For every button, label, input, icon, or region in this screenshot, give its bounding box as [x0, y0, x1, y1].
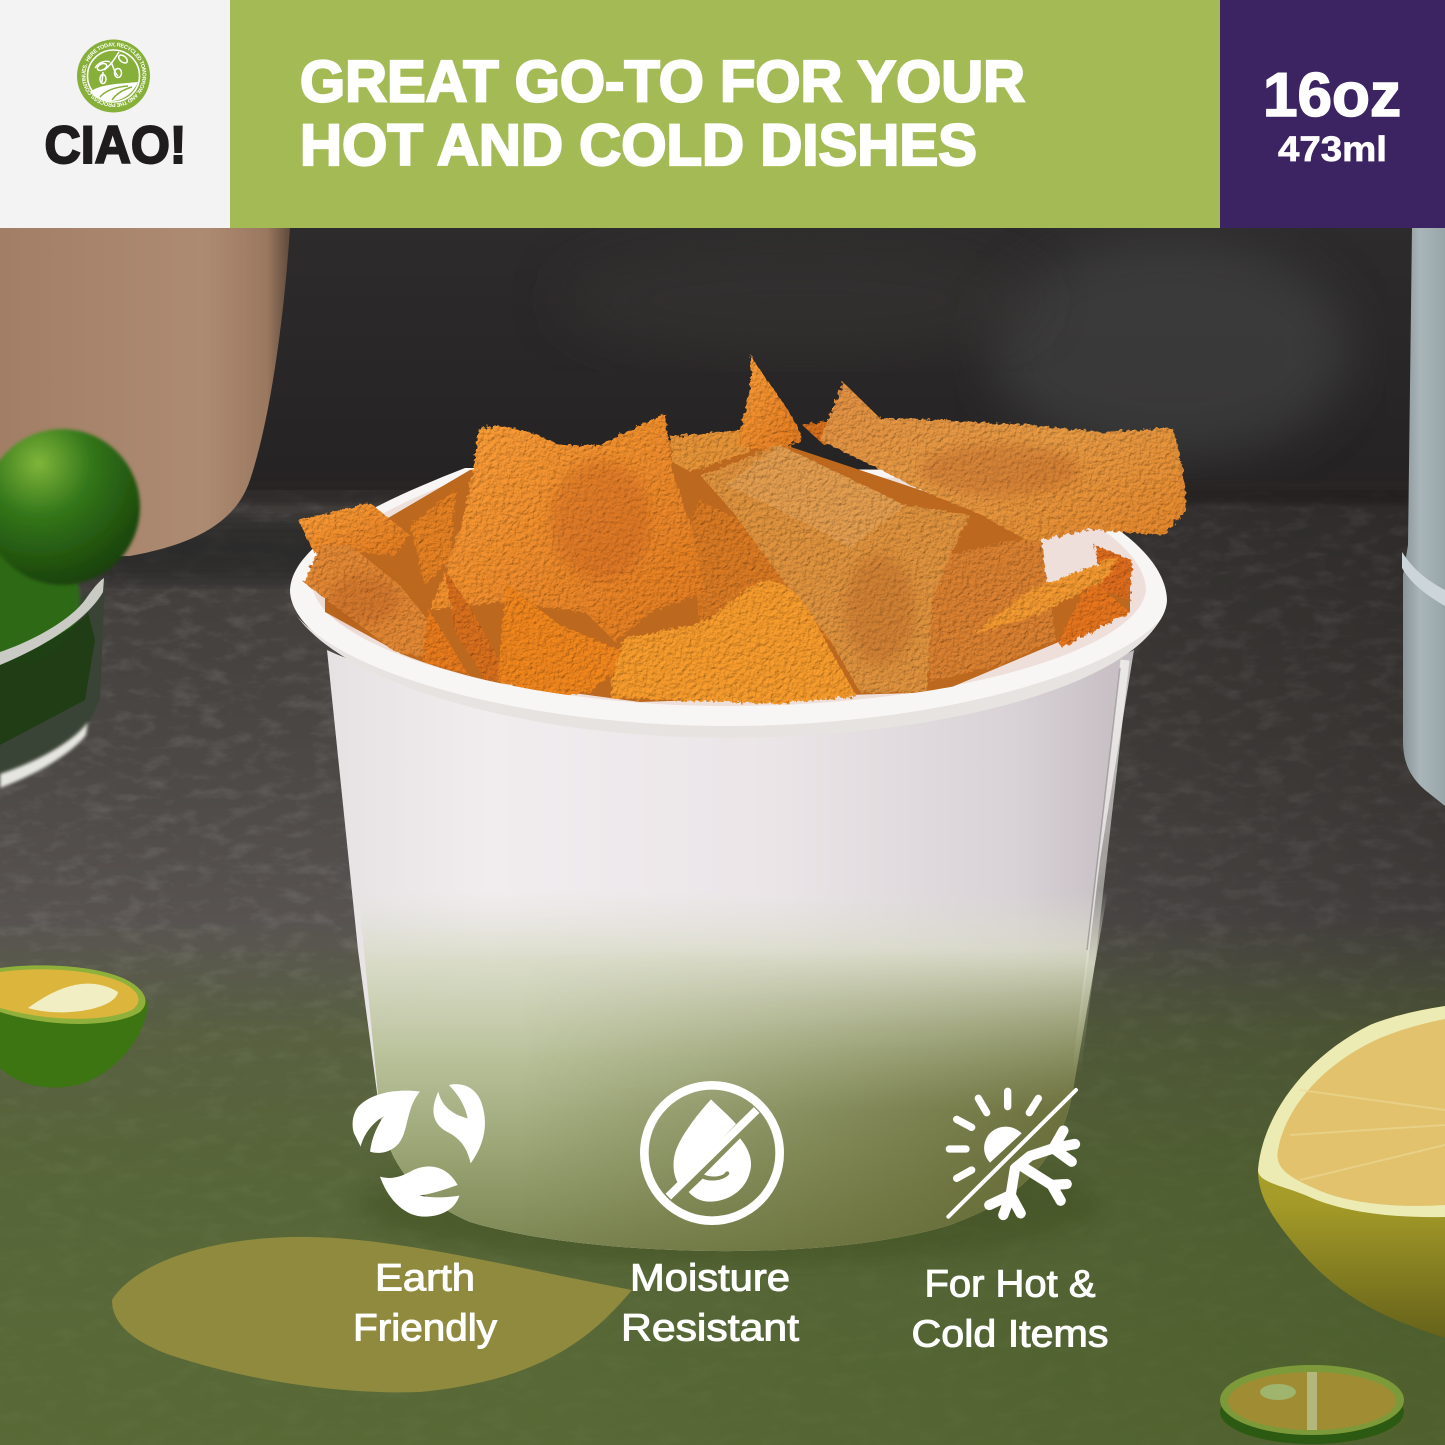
icon: sun and snowflake: [948, 1090, 1076, 1217]
lime slice bottom right: [1220, 1365, 1404, 1444]
label: Friendly: [353, 1308, 497, 1350]
paper cup with chips: [290, 353, 1186, 1251]
label: Cold Items: [912, 1314, 1108, 1356]
logo badge: HERE TODAY, RECYCLED TOMORROW, AND THE PROCESS CONTINUES.: [82, 42, 146, 107]
green gradient overlay: [0, 920, 1445, 1445]
cup rim: [290, 468, 1167, 738]
label: Resistant: [621, 1308, 799, 1350]
lemon half right: [1258, 1006, 1445, 1338]
feature: moisture resistant: [621, 1085, 799, 1350]
cup body: [327, 650, 1134, 1251]
feature: earth friendly: [353, 1084, 497, 1350]
size label: 16oz: [1263, 61, 1401, 130]
label: For Hot &: [924, 1264, 1096, 1306]
glass bowl with limes: [0, 429, 140, 788]
red-brown chip shading: [330, 444, 1080, 665]
size label: 473ml: [1278, 130, 1387, 169]
label: Earth: [375, 1258, 475, 1300]
label: Moisture: [630, 1258, 790, 1300]
title: GREAT GO-TO FOR YOUR: [300, 50, 1025, 114]
icon: crossed water drop: [644, 1085, 780, 1221]
cup inner wall: [312, 476, 1146, 706]
chips inside the cup: [298, 353, 1186, 704]
icon: three leaves: [353, 1084, 485, 1217]
feature: hot and cold: [912, 1090, 1108, 1356]
title: [300, 50, 1025, 178]
wooden cutting board: [0, 228, 290, 560]
tortilla chip on table: [112, 1237, 632, 1392]
logo panel: [0, 0, 230, 228]
logo wordmark: CIAO!: [44, 116, 186, 175]
cup shadow: [360, 1145, 1100, 1265]
metal tin: [1402, 228, 1445, 806]
purple size panel: [1220, 0, 1445, 228]
half lime left: [0, 965, 148, 1087]
green title band: [230, 0, 1220, 228]
header: [0, 0, 1445, 228]
size label: [1263, 61, 1401, 169]
title: HOT AND COLD DISHES: [300, 113, 977, 178]
